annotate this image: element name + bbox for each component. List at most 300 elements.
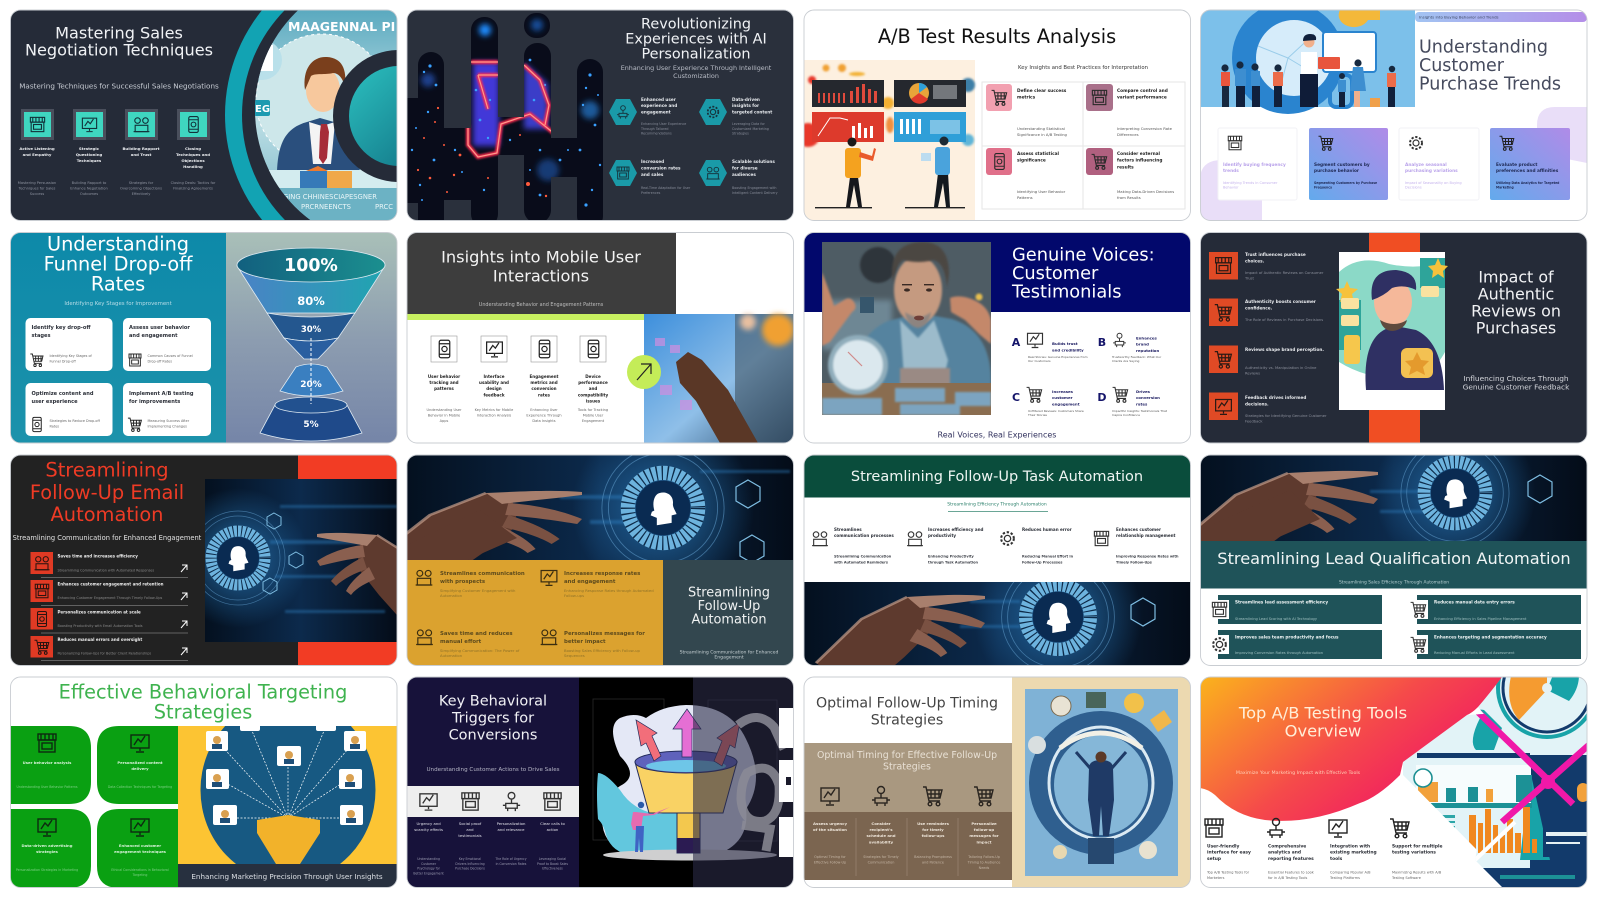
feature items: productivity bbox=[928, 533, 956, 538]
subtitle: Key Insights and Best Practices for Interpretation bbox=[1018, 65, 1148, 71]
benefit items: Follow-ups bbox=[564, 593, 584, 598]
item labels: metrics and bbox=[530, 380, 558, 385]
trigger descriptions: Better Engagement bbox=[413, 871, 445, 875]
review descriptions bbox=[1244, 271, 1327, 423]
feature items: Enhances customer bbox=[1116, 527, 1161, 532]
benefit list: Enhances customer engagement and retention bbox=[58, 582, 164, 586]
tip cards: Common Causes of Funnel bbox=[148, 354, 193, 358]
testimonial benefits: Unfiltered Reviews: Customers Share bbox=[1028, 409, 1084, 413]
item labels: Techniques bbox=[77, 158, 102, 163]
feature items bbox=[812, 527, 1179, 564]
subtitle: Mastering Techniques for Successful Sales Negotiations bbox=[19, 82, 219, 90]
card labels: Evaluate product bbox=[1496, 163, 1537, 168]
title: Follow-Up Email bbox=[30, 481, 184, 504]
item descriptions bbox=[427, 408, 608, 423]
card labels: trends bbox=[1223, 168, 1239, 174]
feature labels: Scalable solutions bbox=[732, 159, 775, 164]
item labels: Active Listening bbox=[19, 146, 55, 151]
tip cards: Measuring Success After bbox=[148, 419, 189, 423]
item descriptions: Tools for Tracking bbox=[578, 408, 608, 412]
tip cards: Rates bbox=[50, 424, 59, 428]
testimonial benefits bbox=[1012, 333, 1168, 417]
title: Customer bbox=[1012, 263, 1099, 284]
tip cards: stages bbox=[32, 333, 51, 339]
green strategy tiles: engagement techniques bbox=[114, 849, 167, 854]
benefit bars: Reduces manual data entry errors bbox=[1434, 600, 1515, 604]
testimonial benefits: rates bbox=[1136, 401, 1148, 406]
testimonial benefits: Increases bbox=[1052, 389, 1073, 394]
item labels: compatibility bbox=[578, 392, 608, 397]
photo: hand and AI gauge bbox=[1183, 412, 1587, 574]
tool labels: Support for multiple bbox=[1392, 844, 1442, 850]
item descriptions: Closing Deals: Tactics for bbox=[171, 181, 215, 185]
tagline: Real Voices, Real Experiences bbox=[938, 430, 1056, 440]
item descriptions: Experience Through bbox=[526, 414, 562, 418]
item descriptions: Mobile User bbox=[583, 414, 604, 418]
feature labels: engagement bbox=[641, 109, 671, 114]
trigger descriptions: in Conversion Rates bbox=[496, 862, 527, 866]
tip cards: Drop-off Rates bbox=[148, 359, 172, 363]
item descriptions: Techniques for Sales bbox=[18, 186, 56, 190]
tool labels: Comprehensive bbox=[1268, 844, 1306, 850]
title band: Streamlining Sales Efficiency Through Automation bbox=[1339, 580, 1449, 586]
feature items: Streamlines bbox=[834, 527, 862, 532]
photo: hand and AI gauge bbox=[168, 479, 447, 642]
illustration: sales manager portrait: PRCRNEENCTS bbox=[301, 203, 351, 211]
item labels: Handling bbox=[183, 164, 203, 169]
feature descriptions: Customized Marketing bbox=[732, 127, 769, 131]
feature items: with Automated Reminders bbox=[834, 560, 888, 564]
card descriptions: Decisions bbox=[1405, 185, 1422, 189]
neon city image in finger shapes bbox=[407, 10, 604, 221]
testimonial benefits: conversion bbox=[1136, 395, 1160, 400]
review descriptions: Strategies for Identifying Genuine Customer bbox=[1245, 414, 1327, 418]
title: Experiences with AI bbox=[625, 32, 767, 48]
feature labels: Data-driven bbox=[732, 97, 760, 102]
title: Impact of bbox=[1478, 268, 1554, 286]
review labels bbox=[1245, 252, 1324, 406]
item descriptions: Engagement bbox=[582, 419, 605, 423]
item descriptions: Building Rapport to bbox=[72, 181, 106, 185]
tool labels: Integration with bbox=[1330, 844, 1370, 850]
trigger descriptions bbox=[413, 857, 568, 875]
magnifier ring bbox=[333, 50, 397, 182]
item labels: design bbox=[486, 386, 502, 391]
title: Personalization bbox=[641, 46, 751, 62]
title block: Streamlining bbox=[688, 586, 770, 600]
tip cards: Implementing Changes bbox=[148, 424, 187, 428]
title: Negotiation Techniques bbox=[25, 40, 213, 60]
red accent blocks bbox=[298, 455, 397, 666]
benefit items: Boosting Sales Efficiency with Follow-up bbox=[564, 648, 640, 653]
funnel percentages: 80% bbox=[297, 294, 325, 308]
subtitle bbox=[947, 502, 1048, 512]
trigger labels: and bbox=[466, 827, 474, 832]
tip cards: Identifying Key Stages of bbox=[50, 354, 92, 358]
brown tactics band: Communication bbox=[868, 860, 894, 864]
brown tactics band: impact bbox=[977, 839, 992, 844]
benefit bars: Streamlines lead assessment efficiency bbox=[1235, 600, 1328, 604]
trigger descriptions: Key Emotional bbox=[459, 857, 481, 861]
title: Streamlining bbox=[45, 458, 169, 482]
feature labels: insights for bbox=[732, 103, 760, 108]
testimonial benefits: Real Stories: Genuine Experiences from bbox=[1028, 355, 1088, 359]
testimonial benefits: Our Customers bbox=[1028, 359, 1051, 363]
item labels: Strategic bbox=[79, 146, 99, 151]
tool icons bbox=[1205, 818, 1409, 838]
illustration: sales manager portrait bbox=[255, 10, 397, 220]
benefit items: Sequences bbox=[564, 653, 585, 658]
item labels: Objections bbox=[181, 158, 205, 163]
panel: Effective Behavioral Targeting Strategies bbox=[10, 677, 397, 888]
finding descriptions: Identifying User Behavior bbox=[1017, 189, 1065, 194]
green strategy tiles: delivery bbox=[131, 766, 149, 771]
tool labels: tools bbox=[1330, 856, 1343, 862]
funnel percentages: 30% bbox=[301, 325, 322, 335]
tool descriptions: Testing Software bbox=[1391, 876, 1421, 880]
green strategy tiles: Data-driven advertising bbox=[22, 843, 72, 848]
decorative shapes bbox=[1200, 107, 1587, 222]
trigger labels: Personalization bbox=[497, 821, 525, 826]
title: Rates bbox=[91, 272, 145, 296]
card descriptions bbox=[1223, 182, 1560, 189]
subtitle: Maximize Your Marketing Impact with Effective Tools bbox=[1236, 770, 1361, 776]
header block bbox=[407, 232, 676, 320]
title: Conversions bbox=[449, 728, 537, 744]
gradient wave bbox=[1200, 677, 1502, 821]
illustration: sales manager portrait: GING CHHINESCIAPESGNER bbox=[283, 193, 377, 201]
tool descriptions bbox=[1206, 870, 1442, 880]
item labels: Techniques and bbox=[176, 152, 210, 157]
item descriptions: Data Insights bbox=[532, 419, 556, 423]
green strategy tiles: Personalized content bbox=[117, 760, 163, 765]
item labels: Closing bbox=[185, 146, 201, 151]
brown tactics band: recipient's bbox=[869, 827, 893, 832]
finding descriptions: Differences bbox=[1117, 132, 1139, 137]
item labels: and Trust bbox=[131, 152, 151, 157]
trigger descriptions: Drivers Influencing bbox=[455, 862, 485, 866]
benefit bars: Streamlining Lead Scoring with AI Technology bbox=[1235, 617, 1318, 621]
tip cards: user experience bbox=[32, 399, 78, 405]
funnel percentages: 5% bbox=[303, 420, 319, 430]
feature labels: Enhanced user bbox=[641, 97, 676, 102]
brown tactics band: follow-ups bbox=[922, 833, 945, 838]
feature labels: for diverse bbox=[732, 165, 758, 170]
subtitle: Understanding Customer Actions to Drive Sales bbox=[426, 767, 560, 773]
panel: Revolutionizing Experiences with AI Personalization bbox=[407, 10, 794, 221]
feature labels: Increased bbox=[641, 159, 664, 164]
benefit bars bbox=[1210, 595, 1581, 659]
panel: Understanding Customer Purchase Trends bbox=[1200, 2, 1587, 222]
trigger labels: Social proof bbox=[459, 821, 481, 826]
testimonial benefits: Trustworthy Feedback: What Our bbox=[1112, 355, 1161, 359]
card labels: Identify buying frequency bbox=[1223, 163, 1286, 168]
brown tactics band: of the situation bbox=[813, 827, 847, 832]
card descriptions: Segmenting Customers by Purchase bbox=[1314, 181, 1377, 185]
review labels: confidence. bbox=[1245, 305, 1273, 310]
brown tactics band: Consider bbox=[871, 821, 891, 826]
feature descriptions bbox=[640, 122, 778, 195]
taupe subtitle band: Optimal Timing for Effective Follow-Up bbox=[817, 750, 997, 761]
benefit bars: Improves sales team productivity and focus bbox=[1235, 634, 1339, 640]
testimonial benefits: Clients Are Saying bbox=[1112, 359, 1139, 363]
benefit items: and engagement bbox=[564, 579, 616, 585]
item labels: usability and bbox=[479, 380, 509, 385]
item descriptions: Strategies for bbox=[129, 181, 153, 185]
benefit bars: Enhancing Efficiency in Sales Pipeline Management bbox=[1434, 617, 1527, 621]
feature items: Timely Follow-Ups bbox=[1116, 560, 1152, 564]
brown tactics band: Assess urgency bbox=[813, 821, 847, 826]
feature descriptions: Recommendations bbox=[641, 132, 672, 136]
subtitle: Streamlining Efficiency Through Automation bbox=[947, 502, 1047, 508]
finding descriptions: Making Data-Driven Decisions bbox=[1117, 189, 1174, 194]
card labels: Analyze seasonal bbox=[1405, 163, 1447, 168]
title: Customer bbox=[1419, 56, 1505, 76]
card descriptions: Impact of Seasonality on Buying bbox=[1405, 181, 1462, 185]
funnel percentages bbox=[284, 256, 338, 430]
finding descriptions: Interpreting Conversion Rate bbox=[1117, 126, 1172, 131]
tool labels: interface for easy bbox=[1207, 850, 1251, 856]
trend cards bbox=[1218, 128, 1570, 200]
illustration: targeting funnel bbox=[178, 698, 397, 882]
benefit items: with prospects bbox=[440, 579, 485, 585]
item descriptions: Key Metrics for Mobile bbox=[475, 408, 513, 412]
tip cards: Optimize content and bbox=[32, 391, 93, 397]
green strategy tiles: User behavior analysis bbox=[23, 760, 72, 765]
item labels: User behavior bbox=[428, 374, 460, 379]
illustration: smiling reviewer bbox=[1336, 252, 1448, 410]
testimonial benefits: A bbox=[1012, 336, 1021, 349]
benefit items: Simplifying Customer Engagement with bbox=[440, 588, 515, 593]
brown tactics band: follow-up bbox=[974, 827, 994, 832]
brown tactics band: Effective Follow-Up bbox=[814, 860, 846, 864]
benefit list bbox=[30, 552, 188, 660]
brown tactics band: Needs bbox=[979, 866, 990, 870]
tool descriptions: Marketers bbox=[1207, 876, 1225, 880]
panel: Impact of Authentic Reviews on Purchases bbox=[1200, 232, 1587, 443]
title block bbox=[663, 560, 794, 666]
icon strip bbox=[407, 786, 579, 817]
taupe subtitle band: Strategies bbox=[883, 762, 931, 772]
trigger descriptions: The Role of Urgency bbox=[495, 857, 527, 861]
testimonial benefits: Drives bbox=[1136, 389, 1150, 394]
item labels: and bbox=[589, 386, 597, 391]
funnel percentages: 100% bbox=[284, 256, 338, 276]
feature labels: audiences bbox=[732, 172, 756, 177]
feature labels: conversion rates bbox=[641, 165, 681, 170]
item descriptions: Enhance Negotiation bbox=[70, 186, 108, 190]
review labels: Trust influences purchase bbox=[1245, 252, 1306, 257]
benefit items: better impact bbox=[564, 639, 606, 645]
item labels bbox=[428, 374, 608, 403]
title block: Streamlining Communication for Enhanced bbox=[680, 650, 778, 656]
funnel chart bbox=[237, 248, 385, 441]
benefit bars: Improving Conversion Rates through Automation bbox=[1235, 651, 1323, 655]
item descriptions: Apps bbox=[440, 419, 449, 423]
feature items: Streamlining Communication bbox=[834, 554, 891, 558]
item descriptions: Behavior in Mobile bbox=[428, 414, 460, 418]
card labels: Segment customers by bbox=[1314, 163, 1370, 168]
review descriptions: Trust bbox=[1244, 276, 1254, 280]
benefit bars: Reducing Manual Efforts in Lead Assessment bbox=[1434, 651, 1515, 655]
title: Strategies bbox=[871, 712, 943, 728]
panel: A/B Test Results Analysis bbox=[804, 28, 1186, 220]
illustration: sales manager portrait: PRCC bbox=[375, 203, 393, 211]
feature labels: experience and bbox=[641, 103, 677, 108]
green strategy tiles: Data Collection Techniques for Targeting bbox=[108, 785, 172, 789]
finding descriptions: Understanding Statistical bbox=[1017, 126, 1065, 131]
trigger labels: action bbox=[547, 827, 559, 832]
green strategy tiles: strategies bbox=[36, 849, 59, 854]
benefit list: Saves time and increases efficiency bbox=[58, 554, 138, 558]
brown tactics band: Personalize bbox=[971, 821, 997, 826]
card descriptions: Utilizing Data Analytics for Targeted bbox=[1496, 181, 1559, 185]
title: Testimonials bbox=[1011, 282, 1121, 303]
feature items: Improving Response Rates with bbox=[1116, 554, 1179, 558]
review descriptions: Feedback bbox=[1245, 419, 1263, 423]
feature descriptions: Preferences bbox=[641, 191, 661, 195]
title block: Follow-Up bbox=[698, 599, 760, 614]
benefit items: Personalizes messages for bbox=[564, 631, 645, 637]
item labels: Building Rapport bbox=[122, 146, 160, 151]
review labels: Reviews shape brand perception. bbox=[1245, 347, 1324, 352]
feature items: Reducing Manual Effort in bbox=[1022, 554, 1073, 558]
feature items: relationship management bbox=[1116, 533, 1176, 538]
illustration: sales manager portrait: MAAGENNAL PI bbox=[288, 19, 395, 34]
brown tactics band: availability bbox=[869, 839, 894, 844]
title: Revolutionizing bbox=[641, 16, 751, 32]
trigger descriptions: Customer bbox=[421, 862, 437, 866]
feature descriptions: Intelligent Content Delivery bbox=[732, 191, 778, 195]
panel: Streamlining Follow-Up Email Automation bbox=[10, 455, 447, 666]
funnel percentages: 20% bbox=[300, 380, 322, 390]
title: Strategies bbox=[154, 700, 252, 724]
benefit list: Streamlining Communication with Automated Responses bbox=[58, 568, 154, 572]
finding labels: Compare control and bbox=[1117, 89, 1168, 94]
tip cards: Assess user behavior bbox=[129, 325, 190, 331]
trigger labels: and relevance bbox=[498, 827, 525, 832]
testimonial benefits: Impactful Insights: Testimonials That bbox=[1112, 409, 1167, 413]
review descriptions: Reviews bbox=[1245, 371, 1260, 375]
benefit items: manual effort bbox=[440, 639, 482, 645]
finding labels: factors influencing bbox=[1117, 158, 1162, 164]
title band bbox=[1200, 541, 1587, 588]
panel: Streamlining Follow-Up Automation bbox=[374, 417, 794, 666]
green strategy tiles: Targeting bbox=[132, 873, 147, 877]
feature descriptions: Boosting Engagement with bbox=[732, 186, 777, 190]
feature items: through Task Automation bbox=[928, 560, 978, 564]
finding descriptions: Significance in A/B Testing bbox=[1017, 132, 1067, 137]
item labels: Questioning bbox=[76, 152, 102, 157]
title: Triggers for bbox=[451, 710, 534, 726]
card descriptions: Frequency bbox=[1314, 185, 1332, 189]
header bbox=[804, 455, 1190, 498]
brown tactics band: Tailoring Follow-Up bbox=[968, 855, 1000, 859]
tip cards: Strategies to Reduce Drop-off bbox=[50, 419, 100, 423]
panel: Genuine Voices: Customer Testimonials bbox=[804, 232, 1190, 443]
footer band: Enhancing Marketing Precision Through User Insights bbox=[191, 872, 383, 881]
illustration: analysts viewing dashboards bbox=[796, 60, 975, 220]
testimonial benefits: B bbox=[1098, 336, 1106, 349]
panel: Optimal Follow-Up Timing Strategies bbox=[804, 677, 1191, 888]
item labels: feedback bbox=[483, 392, 505, 397]
feature labels: and sales bbox=[641, 172, 664, 177]
finding labels bbox=[1017, 88, 1168, 170]
benefit list: Personalizes communication at scale bbox=[58, 610, 141, 614]
trigger descriptions: Proof to Boost Sales bbox=[537, 862, 568, 866]
review labels: decisions. bbox=[1245, 401, 1269, 406]
benefit items: Automation bbox=[440, 593, 463, 598]
testimonial benefits: Enhances bbox=[1136, 336, 1157, 340]
tool descriptions: Essential Features to Look bbox=[1268, 870, 1314, 874]
item labels: Interface bbox=[484, 374, 504, 379]
feature labels bbox=[641, 97, 775, 177]
top banner: Insights into Buying Behavior and Trends bbox=[1419, 14, 1499, 20]
trigger descriptions: Psychology for bbox=[417, 867, 441, 871]
green strategy tiles: Ethical Considerations in Behavioral bbox=[111, 868, 169, 872]
subtitle: Enhancing User Experience Through Intelligent bbox=[621, 64, 771, 72]
review labels: Feedback drives informed bbox=[1245, 395, 1306, 400]
title: Key Behavioral bbox=[439, 694, 547, 710]
finding labels: metrics bbox=[1017, 95, 1036, 101]
panel: Key Behavioral Triggers for Conversions bbox=[407, 677, 794, 888]
item descriptions: Mastering Persuasion bbox=[18, 181, 56, 185]
title: Insights into Mobile User bbox=[441, 248, 641, 266]
item labels bbox=[19, 146, 210, 169]
panel: Top A/B Testing Tools Overview bbox=[1200, 639, 1596, 888]
subtitle: Streamlining Communication for Enhanced Engagement bbox=[13, 534, 202, 542]
illustration: sales manager portrait: EG bbox=[255, 104, 270, 115]
title block: Automation bbox=[691, 612, 767, 628]
trigger labels: Clear calls to bbox=[540, 821, 565, 826]
testimonial benefits: C bbox=[1012, 391, 1020, 404]
review descriptions: The Role of Reviews in Purchase Decisions bbox=[1244, 318, 1323, 322]
feature descriptions: Through Tailored bbox=[640, 127, 668, 131]
tip cards: Identify key drop-off bbox=[32, 325, 90, 331]
tool descriptions: Top A/B Testing Tools for bbox=[1207, 870, 1249, 874]
trigger labels: scarcity effects bbox=[414, 827, 443, 832]
panel: Insights into Mobile User Interactions bbox=[407, 232, 794, 443]
title: Top A/B Testing Tools bbox=[1239, 704, 1407, 722]
trigger descriptions: Effectiveness bbox=[542, 867, 563, 871]
tool labels: testing variations bbox=[1392, 850, 1436, 856]
title: Understanding bbox=[1419, 38, 1548, 58]
title: Understanding bbox=[47, 232, 189, 256]
brown tactics band: schedule and bbox=[866, 833, 896, 838]
subtitle: Understanding Behavior and Engagement Patterns bbox=[479, 302, 604, 308]
trigger labels bbox=[414, 821, 565, 838]
feature items: Reduces human error bbox=[1022, 527, 1072, 532]
finding labels: variant performance bbox=[1117, 95, 1167, 101]
item descriptions bbox=[18, 181, 216, 196]
item descriptions: Enhancing User bbox=[530, 408, 558, 412]
panel: Streamlining Follow-Up Task Automation bbox=[804, 455, 1190, 701]
testimonial benefits: Inspire Confidence bbox=[1112, 413, 1140, 417]
trigger descriptions: Purchase Decisions bbox=[455, 867, 485, 871]
title: A/B Test Results Analysis bbox=[878, 25, 1116, 48]
benefit items: Enhancing Response Rates through Automated bbox=[564, 588, 654, 593]
benefit list: Personalizing Follow-Ups for Better Client Relationships bbox=[58, 652, 151, 656]
taupe subtitle band bbox=[804, 743, 1012, 812]
review labels: Authenticity boosts consumer bbox=[1245, 299, 1316, 304]
brown tactics band: for timely bbox=[922, 827, 944, 832]
tip cards: Funnel Drop-off bbox=[50, 359, 76, 363]
brown tactics band: Strategies for Timely bbox=[863, 855, 899, 859]
finding labels: results bbox=[1117, 164, 1134, 170]
tool labels: setup bbox=[1207, 856, 1221, 862]
photo: hand and AI gauge bbox=[804, 533, 1190, 701]
trigger descriptions: Leveraging Social bbox=[539, 857, 566, 861]
